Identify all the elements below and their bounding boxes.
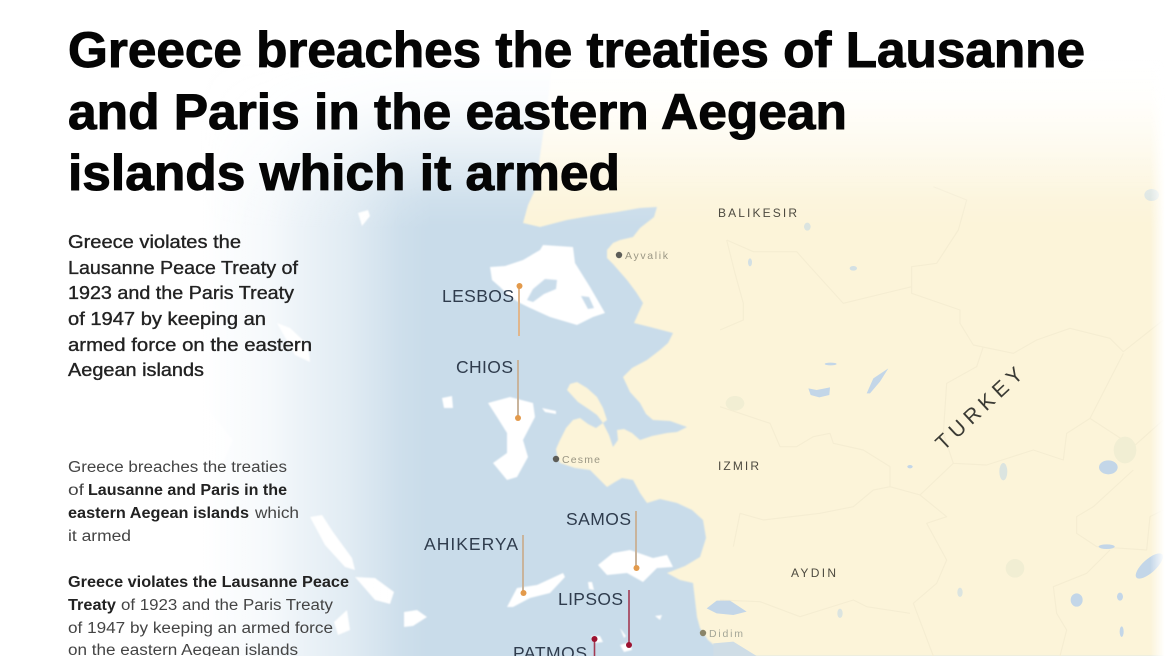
text block: treaties breach: which xyxy=(254,505,299,522)
title: and Paris in the eastern Aegean xyxy=(68,84,847,140)
island callout: Chios: CHIOS xyxy=(456,357,513,377)
island callout: Lesbos: LESBOS xyxy=(442,286,514,306)
province label: Izmir: IZMIR xyxy=(718,459,759,473)
province label: Balikesir: BALIKESIR xyxy=(718,206,797,220)
intro text block: Greece violates the xyxy=(68,232,241,252)
island callout: Lipsos: LIPSOS xyxy=(558,589,623,609)
island callout: Lipsos xyxy=(558,589,632,648)
province label: Aydin: AYDIN xyxy=(791,566,836,580)
city marker: Ayvalik: Ayvalik xyxy=(625,250,669,262)
text block: Lausanne violation: Treaty xyxy=(68,597,116,614)
island: Ikaria xyxy=(507,573,565,607)
intro text block: of 1947 by keeping an xyxy=(68,309,266,329)
text block: treaties breach: Greece breaches the treaties xyxy=(68,459,287,476)
island callout: Chios xyxy=(456,357,521,421)
intro text block: armed force on the eastern xyxy=(68,335,312,355)
text block: treaties breach xyxy=(68,459,299,545)
island callout: Samos xyxy=(566,509,640,571)
text block: Lausanne violation: of 1947 by keeping an armed force xyxy=(68,620,333,637)
island callout: Lesbos xyxy=(442,283,522,336)
island callout: Patmos xyxy=(513,636,598,656)
title: islands which it armed xyxy=(68,145,620,201)
title: Greece breaches the treaties of Lausanne xyxy=(68,22,1085,78)
text block: Lausanne violation: Greece violates the Lausanne Peace xyxy=(68,574,349,591)
island callout: Ahikerya xyxy=(424,534,526,596)
landmass: Turkey xyxy=(523,0,1168,656)
islands xyxy=(150,210,673,652)
intro text block: 1923 and the Paris Treaty xyxy=(68,283,294,303)
island callout: Ahikerya: AHIKERYA xyxy=(424,534,518,554)
title xyxy=(68,22,1085,201)
text block: treaties breach: of xyxy=(68,482,85,499)
island: Samos xyxy=(598,550,673,582)
text block: Lausanne violation: of 1923 and the Paris Treaty xyxy=(121,597,333,614)
intro text block: Lausanne Peace Treaty of xyxy=(68,258,299,278)
intro text block: Aegean islands xyxy=(68,360,204,380)
gulfs cut into Lesbos xyxy=(527,279,594,309)
lakes and provincial borders of Turkey xyxy=(707,187,1167,656)
small islands xyxy=(442,396,453,408)
city marker: Didim: Didim xyxy=(709,628,743,640)
text block: treaties breach: Lausanne and Paris in the xyxy=(88,482,287,499)
city marker: Cesme: Cesme xyxy=(562,454,600,466)
text block: Lausanne violation xyxy=(68,574,349,656)
country label: Turkey: TURKEY xyxy=(931,360,1031,455)
island callout: Samos: SAMOS xyxy=(566,509,631,529)
text block: treaties breach: eastern Aegean islands xyxy=(68,505,249,522)
text block: treaties breach: it armed xyxy=(68,528,131,545)
island: Chios xyxy=(488,397,535,480)
island: Lesbos xyxy=(490,245,605,325)
intro text block xyxy=(68,232,312,380)
fade to white: map edges xyxy=(200,0,430,656)
